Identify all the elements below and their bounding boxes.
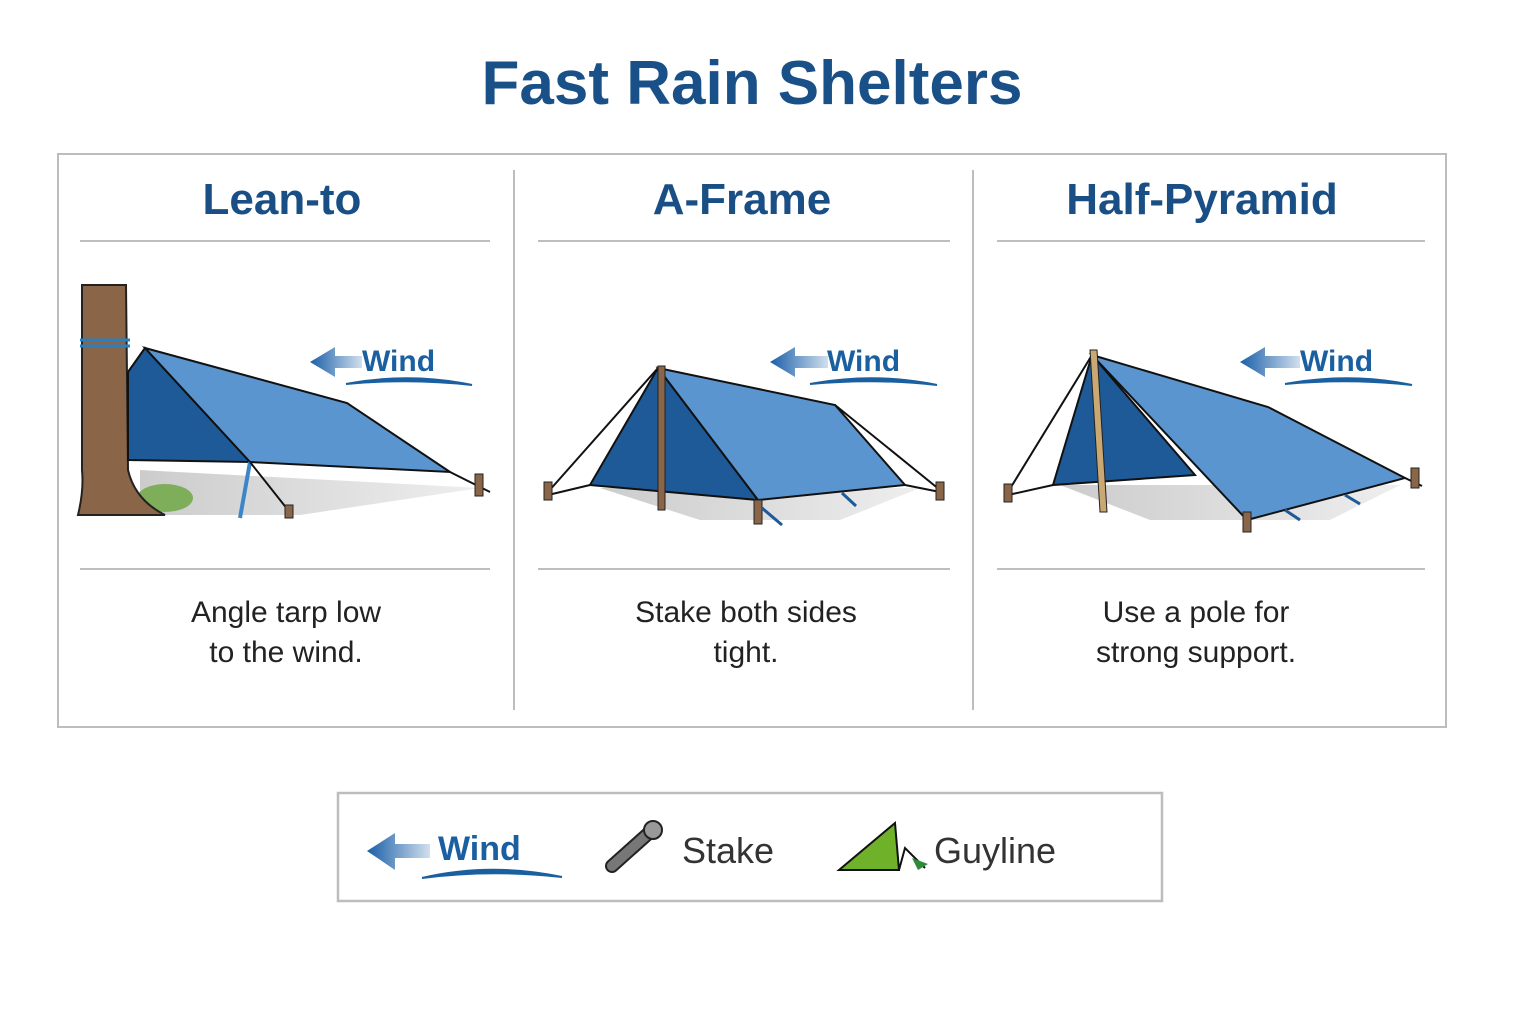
title: Fast Rain Shelters	[482, 49, 1022, 118]
caption: A-frame: Stake both sides	[635, 596, 857, 629]
caption: A-frame: tight.	[713, 636, 779, 669]
legend: stake: Stake	[682, 830, 774, 871]
legend	[338, 793, 1162, 901]
legend: guyline: Guyline	[934, 830, 1056, 871]
icon: wind lean-to: Wind	[362, 345, 435, 378]
legend: wind	[367, 830, 562, 878]
heading: A-Frame: A-Frame	[653, 175, 831, 224]
caption: half-pyramid: strong support.	[1096, 636, 1296, 669]
caption: half-pyramid: Use a pole for	[1103, 596, 1289, 629]
heading: Half-Pyramid: Half-Pyramid	[1066, 175, 1338, 224]
illustration: half-pyramid	[1004, 350, 1422, 532]
caption: lean-to: Angle tarp low	[191, 596, 381, 629]
caption: lean-to: to the wind.	[209, 636, 363, 669]
legend: guyline	[839, 823, 1056, 871]
legend: wind: Wind	[438, 830, 521, 868]
heading: Lean-to: Lean-to	[203, 175, 361, 224]
icon: wind lean-to	[310, 345, 472, 385]
icon: wind half-pyramid	[1240, 345, 1412, 385]
icon: wind half-pyramid: Wind	[1300, 345, 1373, 378]
icon: wind A-frame	[770, 345, 937, 385]
illustration: A-frame	[544, 366, 944, 525]
legend: stake	[612, 821, 774, 871]
icon: wind A-frame: Wind	[827, 345, 900, 378]
panel: shelters	[58, 154, 1446, 727]
illustration: lean-to	[78, 285, 490, 518]
